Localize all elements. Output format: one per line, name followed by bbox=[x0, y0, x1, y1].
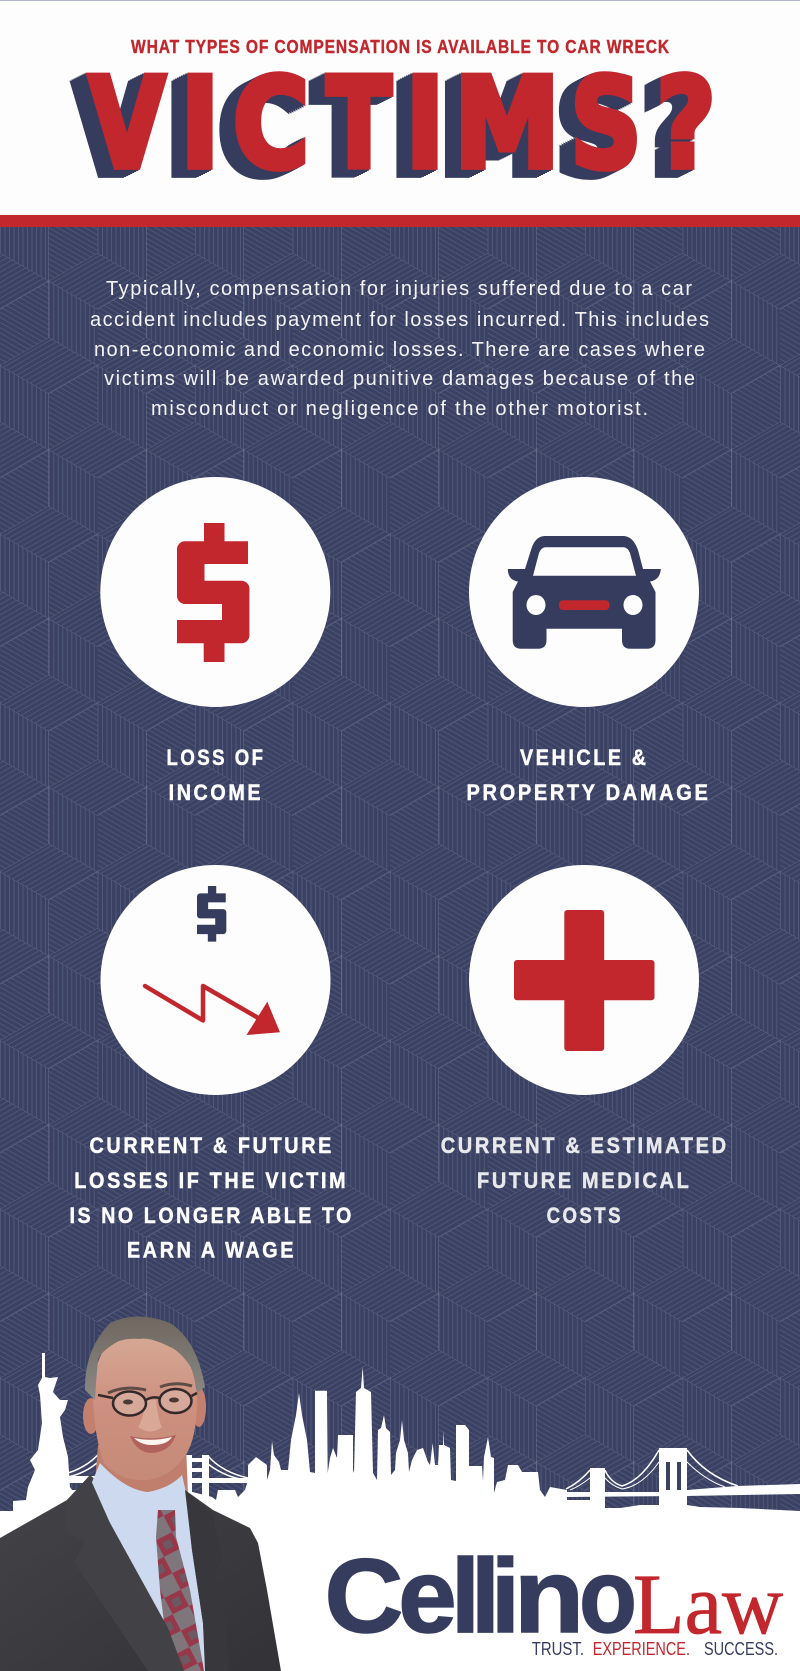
logo: Cellino wordmark bbox=[325, 1538, 637, 1655]
label: current and future losses: CURRENT & FUTURE bbox=[90, 1133, 334, 1158]
intro paragraph bbox=[90, 278, 710, 420]
necktie bbox=[156, 1510, 204, 1671]
eyes bbox=[123, 1400, 133, 1404]
subtitle: WHAT TYPES OF COMPENSATION IS AVAILABLE TO CAR WRECK bbox=[131, 37, 670, 57]
label: current and estimated medical costs: CURRENT & ESTIMATED bbox=[441, 1133, 729, 1158]
header band bbox=[0, 0, 800, 215]
harbor bridge bbox=[68, 1448, 250, 1500]
title: VICTIMS?: I bbox=[180, 52, 219, 196]
label: loss of income: INCOME bbox=[169, 780, 263, 805]
nose bbox=[138, 1400, 162, 1432]
panel: current and estimated medical costs bbox=[441, 865, 729, 1228]
city skyline silhouette bbox=[0, 1353, 800, 1671]
logo: Cellino wordmark: e bbox=[398, 1538, 457, 1655]
icon: dollar with falling arrow in circle bbox=[100, 865, 330, 1095]
icon: car in circle bbox=[469, 477, 699, 707]
icon: dollar sign in circle bbox=[100, 477, 330, 707]
logo: Cellino wordmark: l bbox=[471, 1538, 500, 1655]
tagline: EXPERIENCE. bbox=[593, 1638, 690, 1659]
logo: Cellino wordmark: o bbox=[579, 1538, 637, 1655]
title: VICTIMS?: V bbox=[89, 52, 165, 196]
icon: medical cross in circle bbox=[469, 865, 699, 1095]
title: VICTIMS?: ? bbox=[656, 52, 716, 196]
East river bridges bbox=[566, 1448, 800, 1508]
logo: Cellino wordmark: C bbox=[325, 1538, 403, 1655]
eyebrows bbox=[108, 1384, 192, 1393]
title: VICTIMS?: I bbox=[406, 52, 444, 196]
tagline bbox=[532, 1638, 778, 1659]
intro paragraph: accident includes payment for losses incurred. This includes bbox=[90, 309, 710, 331]
label: current and future losses: LOSSES IF THE VICTIM bbox=[74, 1168, 348, 1193]
patterned navy background bbox=[0, 227, 800, 1527]
logo: Cellino wordmark: n bbox=[514, 1538, 584, 1655]
panel: current and future losses bbox=[70, 865, 354, 1262]
title: VICTIMS? bbox=[70, 52, 716, 196]
label: loss of income: LOSS OF bbox=[166, 745, 266, 770]
shirt bbox=[90, 1463, 206, 1671]
label: current and estimated medical costs: COSTS bbox=[547, 1203, 623, 1228]
logo: Cellino wordmark: l bbox=[451, 1538, 480, 1655]
label: current and estimated medical costs: FUTURE MEDICAL bbox=[477, 1168, 691, 1193]
smile bbox=[130, 1435, 176, 1453]
ears bbox=[83, 1398, 99, 1434]
intro paragraph: non-economic and economic losses. There are cases where bbox=[94, 339, 706, 361]
title: VICTIMS?: T bbox=[327, 52, 391, 196]
label: vehicle and property damage: VEHICLE & bbox=[520, 745, 649, 770]
label: vehicle and property damage bbox=[466, 745, 710, 805]
red divider bar bbox=[0, 215, 800, 227]
title: VICTIMS?: M bbox=[454, 52, 559, 196]
intro paragraph: victims will be awarded punitive damages because of the bbox=[104, 368, 696, 390]
logo: Law wordmark: Law bbox=[633, 1556, 783, 1652]
tagline: TRUST. bbox=[532, 1638, 584, 1659]
label: current and estimated medical costs bbox=[441, 1133, 729, 1228]
label: vehicle and property damage: PROPERTY DAMAGE bbox=[466, 780, 710, 805]
label: current and future losses: IS NO LONGER ABLE TO bbox=[70, 1203, 354, 1228]
intro paragraph: Typically, compensation for injuries suffered due to a car bbox=[106, 278, 693, 300]
title: VICTIMS?: S bbox=[570, 52, 641, 196]
label: current and future losses: EARN A WAGE bbox=[127, 1238, 296, 1262]
label: loss of income bbox=[166, 745, 266, 805]
suit jacket bbox=[0, 1475, 281, 1671]
logo: Cellino wordmark: i bbox=[491, 1538, 520, 1655]
title: VICTIMS?: C bbox=[233, 52, 309, 196]
eyeglasses bbox=[98, 1389, 197, 1416]
neck bbox=[94, 1445, 188, 1495]
panel: loss of income bbox=[100, 477, 330, 805]
tagline: SUCCESS. bbox=[704, 1638, 778, 1659]
portrait of attorney bbox=[0, 1316, 281, 1671]
logo: Law wordmark bbox=[532, 1556, 783, 1659]
jacket lapels bbox=[65, 1478, 184, 1671]
intro paragraph: misconduct or negligence of the other motorist. bbox=[151, 398, 649, 420]
label: current and future losses bbox=[70, 1133, 354, 1262]
hair bbox=[85, 1316, 205, 1400]
face bbox=[93, 1331, 197, 1480]
panel: vehicle and property damage bbox=[466, 477, 710, 805]
